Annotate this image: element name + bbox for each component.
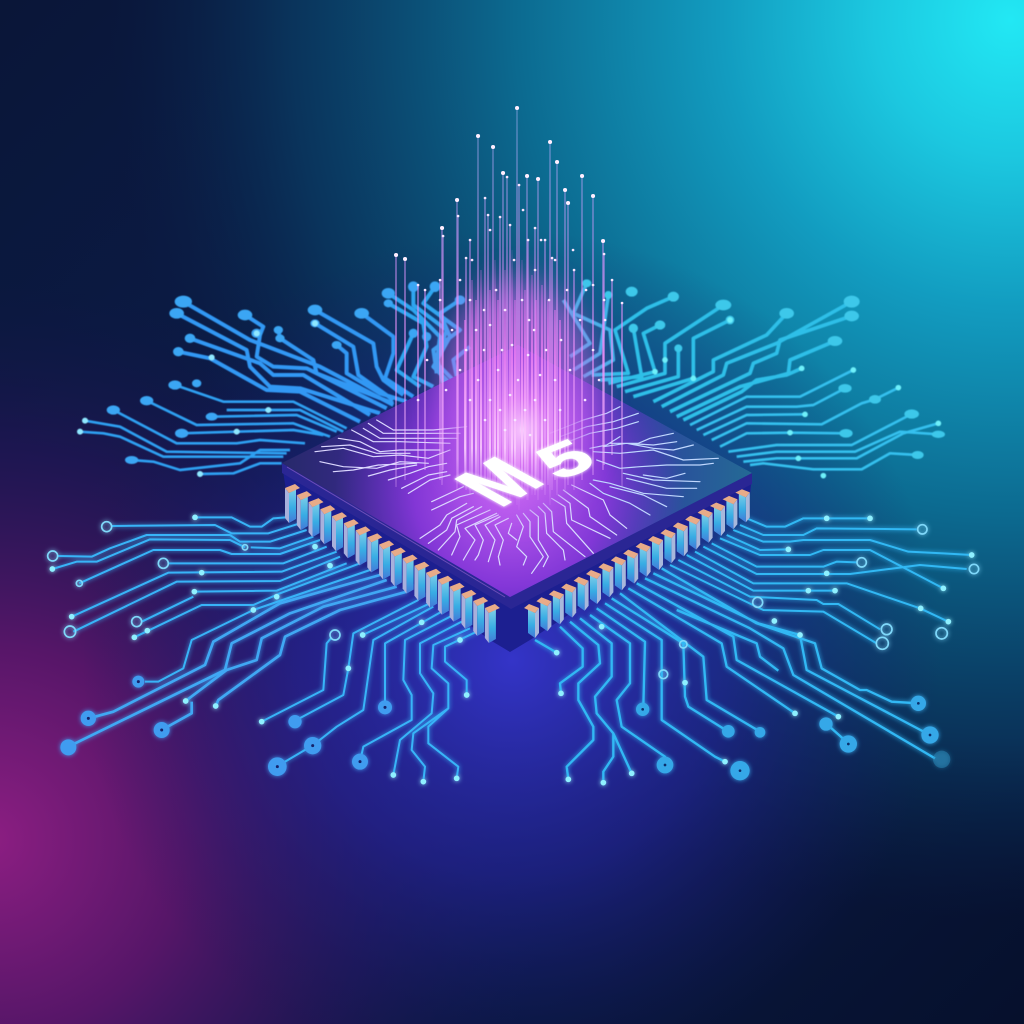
- circuit traces: top left: [80, 281, 470, 474]
- pins: left edge: [285, 484, 500, 643]
- left edge highlight: [287, 467, 505, 597]
- beam glow: [440, 280, 596, 510]
- vertical light lines: [396, 108, 622, 510]
- chip body: [282, 465, 752, 652]
- circuit traces: top right: [563, 279, 945, 476]
- light dots: [418, 177, 622, 435]
- chip label: M5: [437, 429, 608, 517]
- bright center lines: [465, 250, 560, 500]
- chip label: M5: M: [437, 447, 562, 517]
- chip top surface: [282, 345, 752, 597]
- fiber light beam rising from chip: [396, 108, 622, 525]
- circuit traces: bottom left: [48, 517, 477, 782]
- chip surface circuit lines: right: [517, 407, 718, 573]
- circuit traces: bottom right: [535, 518, 979, 783]
- chip side bevel: [282, 463, 752, 609]
- pins: right edge: [524, 488, 750, 638]
- chip label: M5: 5: [523, 429, 608, 490]
- chip surface circuit lines: left: [315, 420, 517, 565]
- chip: [282, 345, 752, 652]
